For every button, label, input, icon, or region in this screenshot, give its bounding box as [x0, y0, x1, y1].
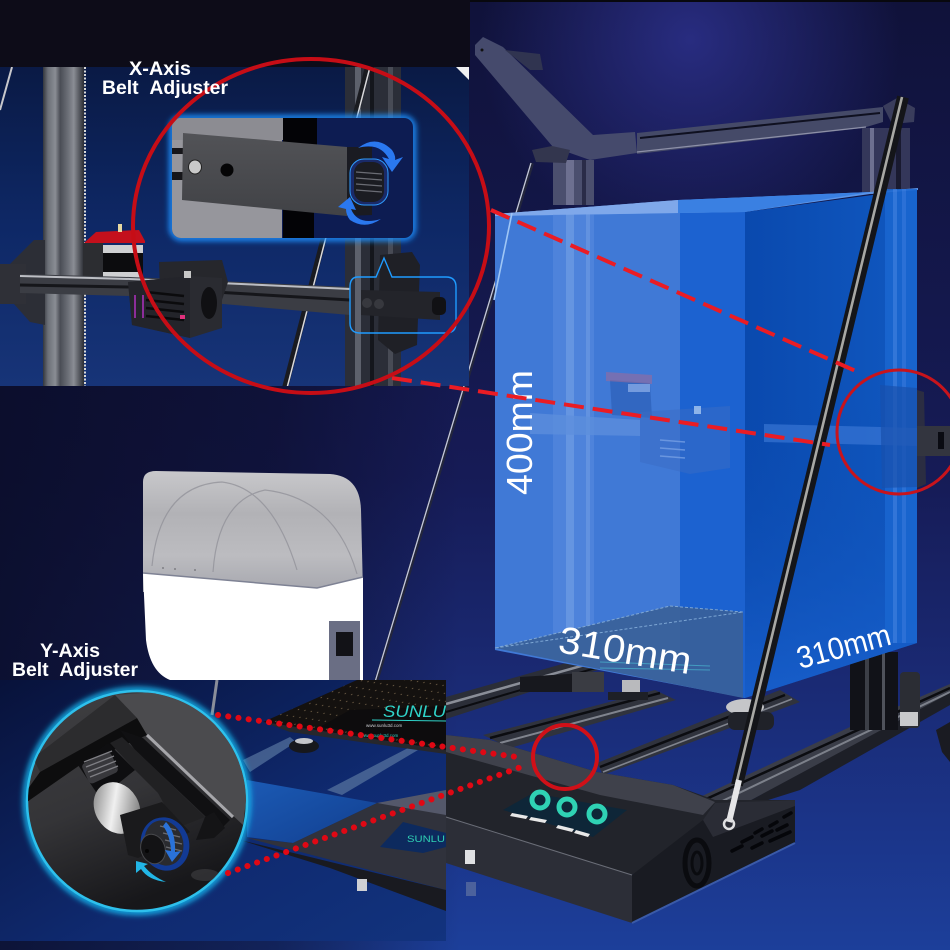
timing gear [78, 750, 135, 792]
ghost frame inside volume [530, 189, 917, 643]
callout: belt adjuster close-up [172, 118, 413, 238]
corner notch [456, 67, 469, 80]
heated bed: SUNLU [383, 702, 447, 721]
LCD screen [503, 792, 627, 837]
circular magnifier [26, 690, 250, 912]
label: 400mm: 400mm [499, 370, 540, 495]
filament dryer box [143, 471, 363, 680]
adjuster bracket [110, 737, 200, 818]
control box in inset [240, 780, 446, 911]
label: 310mm side: 310mm [793, 617, 895, 676]
x axis carriage detail at right [917, 390, 950, 488]
left aluminium upright [43, 67, 85, 386]
vents [732, 813, 791, 851]
corner rod [0, 67, 12, 110]
heated bed: www.sunlu3d.com [362, 733, 399, 738]
bracket left [0, 240, 45, 325]
right vertical frame base [850, 652, 920, 730]
rod in inset [212, 680, 217, 715]
red dashed connector lines [392, 210, 858, 445]
X rail [20, 274, 350, 315]
heated bed [263, 680, 447, 754]
title: X-Axis Belt Adjuster: X-Axis [129, 59, 191, 80]
fan [685, 840, 709, 886]
title: Y-Axis Belt Adjuster: Belt Adjuster [12, 660, 139, 681]
stepper motor [83, 224, 145, 281]
label: 310mm front: 310mm [556, 619, 695, 683]
power switch [465, 850, 475, 864]
knob [136, 817, 190, 882]
title: Y-Axis Belt Adjuster [12, 641, 139, 681]
panel: X-axis inset [0, 67, 469, 388]
printer frame top and arm [475, 37, 915, 205]
title: X-Axis Belt Adjuster [102, 59, 229, 99]
control box in inset: SUNLU [407, 834, 445, 844]
printer base rails [446, 642, 950, 813]
adjuster knob [350, 159, 388, 205]
pulley wheel [94, 782, 140, 834]
blue build volume [494, 188, 918, 698]
belt tensioner mount [361, 252, 446, 354]
title: Y-Axis Belt Adjuster: Y-Axis [40, 641, 100, 662]
frame behind [243, 737, 418, 795]
control box [446, 735, 795, 923]
title: X-Axis Belt Adjuster: Belt Adjuster [102, 78, 229, 99]
thin left rod [375, 163, 532, 682]
small callout outline [350, 258, 456, 333]
large diagonal rod [724, 97, 903, 829]
hotend carriage [128, 260, 228, 338]
thin rod [285, 67, 370, 388]
rotation arrows [338, 141, 403, 225]
bed plate [495, 606, 743, 698]
red circle: Y-axis location [533, 725, 597, 789]
right aluminium upright [345, 67, 401, 386]
red circle: X-axis inset [133, 59, 489, 393]
red dotted connector lines [218, 715, 521, 873]
bed knob [289, 738, 319, 753]
panel: Y-axis inset [0, 680, 447, 941]
heated bed: www.sunlu3d.com [366, 723, 403, 728]
red circle: right carriage [837, 370, 950, 494]
